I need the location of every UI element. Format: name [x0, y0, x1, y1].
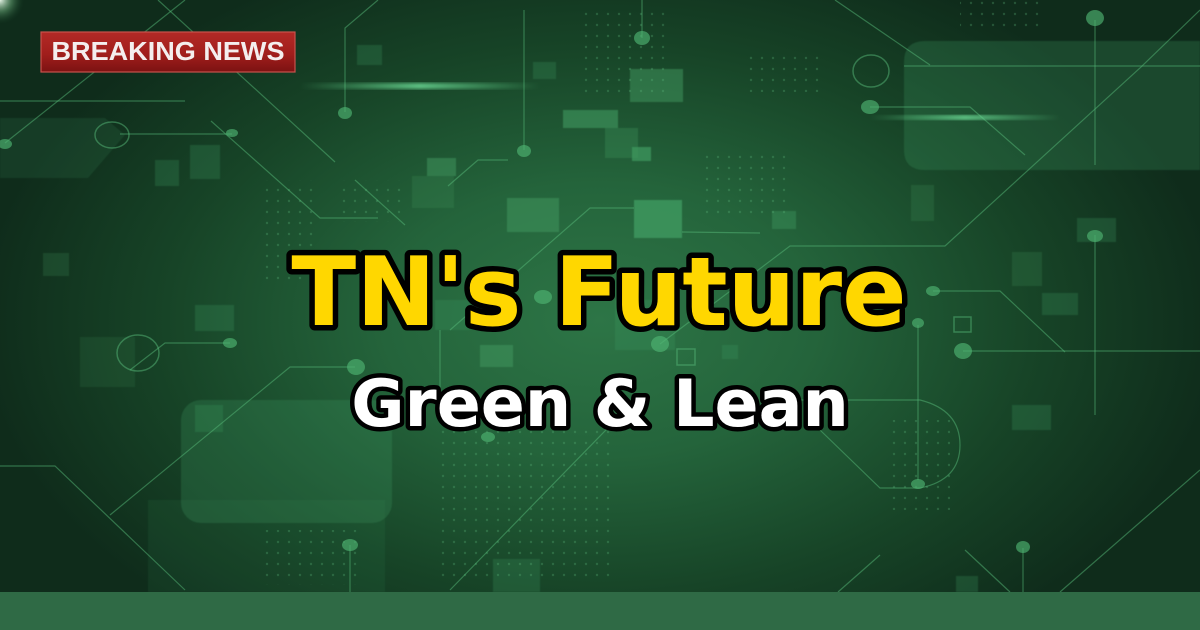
- circuit nodes: [0, 10, 1104, 553]
- light streaks: [300, 83, 1060, 120]
- dot grids: [260, 0, 1040, 585]
- corner glow: [0, 0, 24, 24]
- outlined rings and squares: [95, 55, 971, 371]
- bottom band: [0, 592, 1200, 630]
- badge text: BREAKING NEWS: [52, 38, 284, 66]
- subtitle: Green & Lean: [351, 367, 849, 442]
- title: TN's Future: [291, 238, 907, 348]
- breaking news badge: [41, 32, 295, 72]
